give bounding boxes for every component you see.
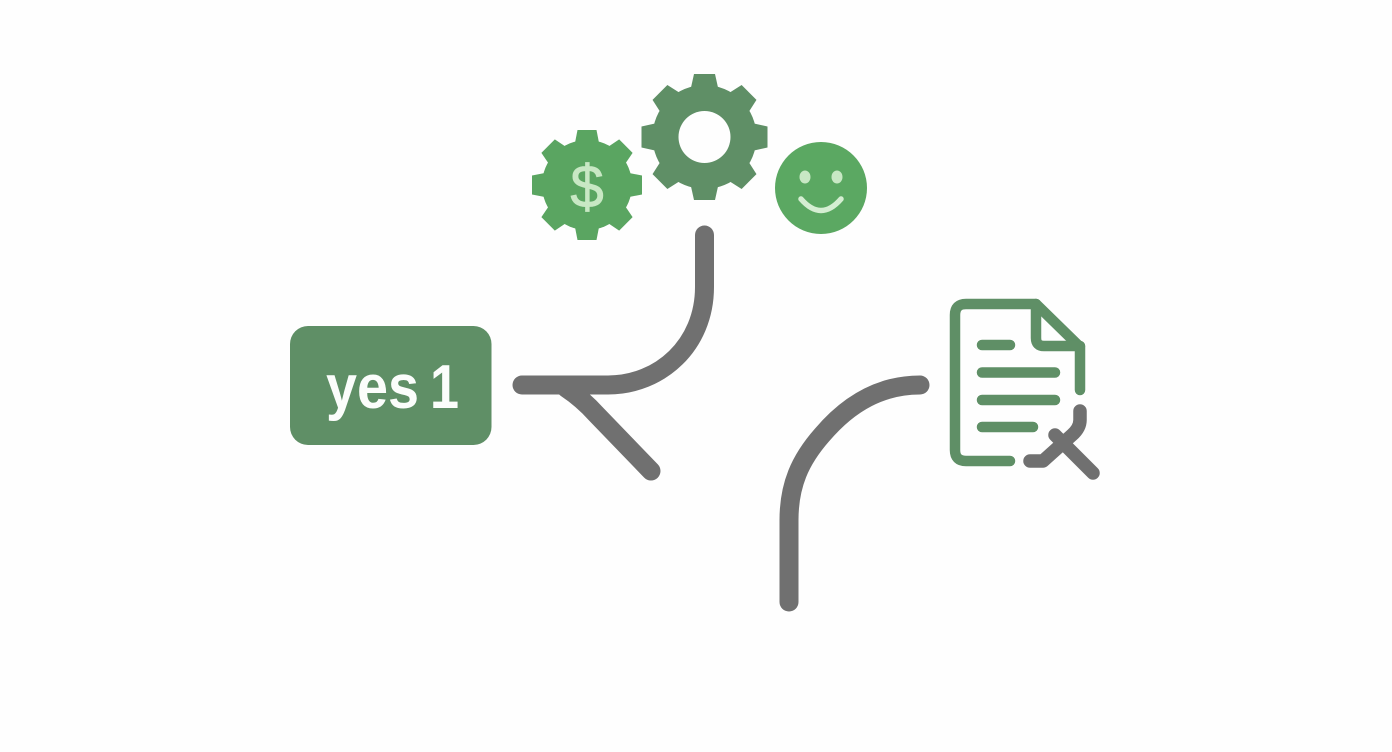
icon: dollar gear: $ xyxy=(570,153,604,220)
icon: dollar gear xyxy=(532,130,642,240)
label: yes 1 box: 1 xyxy=(430,353,459,422)
icon: smiley face xyxy=(775,142,867,234)
icon: large gear xyxy=(642,74,768,200)
icon: document with cross xyxy=(955,304,1093,473)
arrow: connector from gear to yes box xyxy=(522,235,704,471)
label: yes 1 box xyxy=(290,326,492,445)
arrow: connector from document downward xyxy=(789,385,920,602)
label: yes 1 box: yes xyxy=(326,353,419,422)
